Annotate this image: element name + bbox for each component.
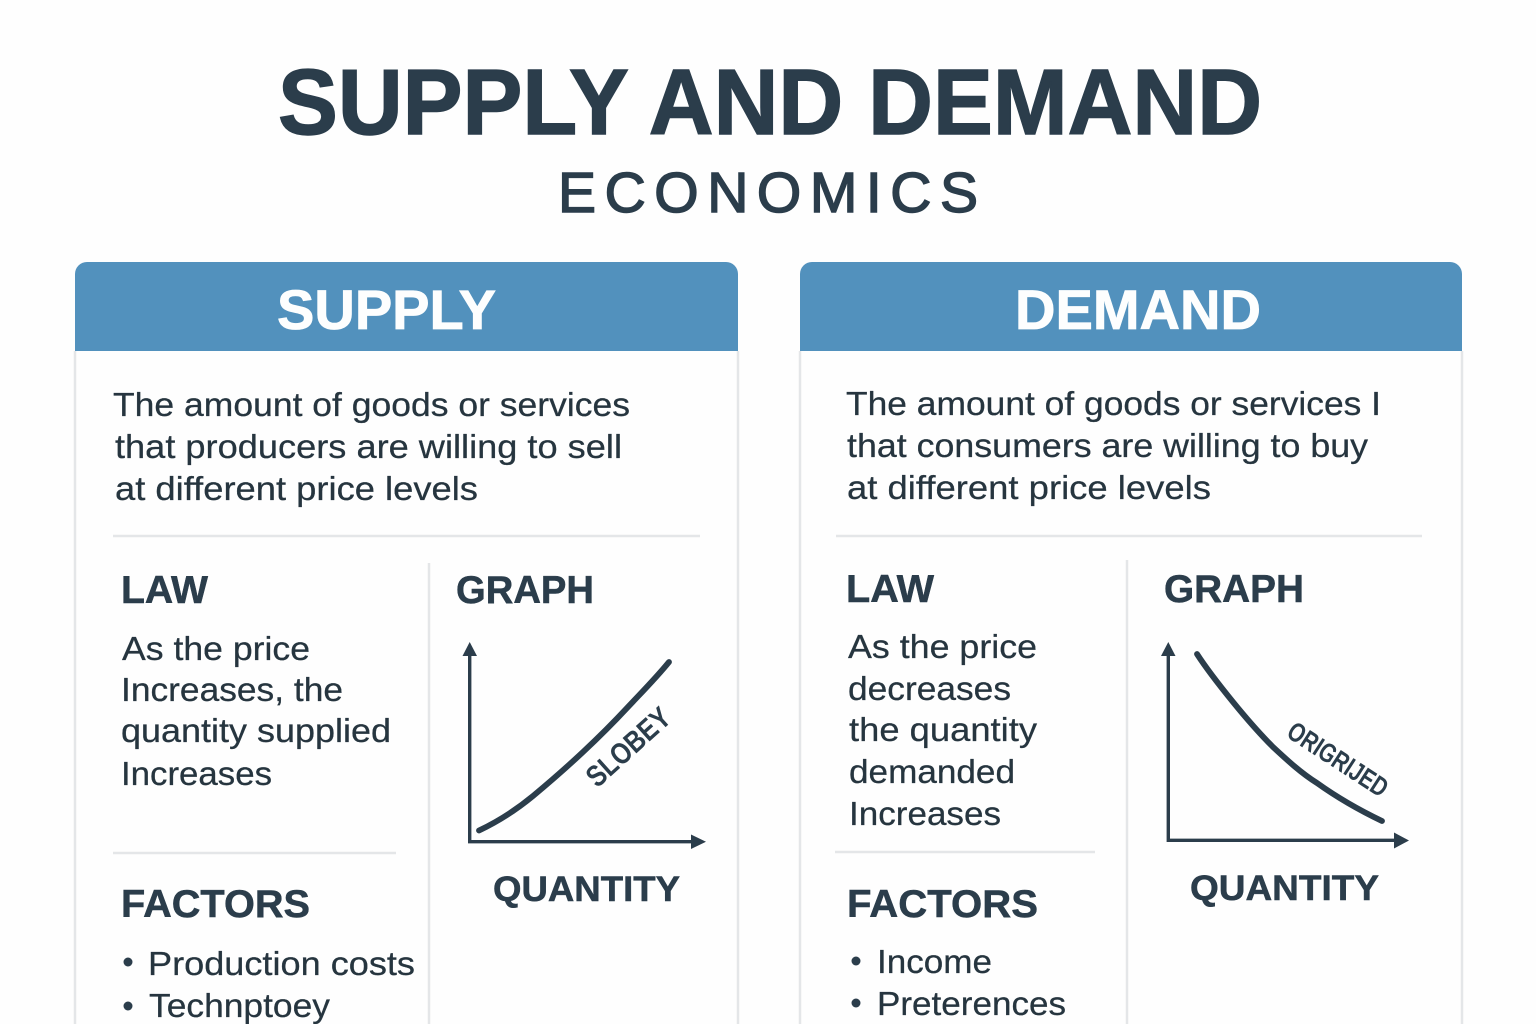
supply definition: The amount of goods or services bbox=[113, 386, 630, 423]
demand definition: that consumers are willing to buy bbox=[847, 427, 1369, 464]
panel: demand bbox=[800, 262, 1462, 1024]
demand graph: ORIGRIJED bbox=[1282, 716, 1394, 803]
panel: supply bbox=[75, 262, 738, 1024]
demand factors list: Income bbox=[877, 943, 992, 980]
demand graph axis label: QUANTITY bbox=[1190, 869, 1379, 908]
supply heading: SUPPLY bbox=[277, 278, 496, 341]
supply definition: that producers are willing to sell bbox=[115, 428, 622, 465]
supply law heading: LAW bbox=[121, 569, 208, 612]
demand law text: the quantity bbox=[849, 711, 1038, 748]
supply factors heading: FACTORS bbox=[121, 883, 310, 926]
demand law heading: LAW bbox=[846, 568, 934, 611]
title: SUPPLY AND DEMAND bbox=[278, 50, 1262, 154]
supply header bar bbox=[75, 262, 738, 351]
supply definition bbox=[113, 386, 630, 507]
supply law text: Increases bbox=[121, 755, 272, 792]
supply graph: SLOBEY bbox=[580, 701, 678, 794]
supply factors list bbox=[124, 945, 415, 1024]
demand factors list: Preterences bbox=[877, 985, 1066, 1022]
demand law text bbox=[848, 628, 1038, 832]
demand graph bbox=[1161, 642, 1409, 848]
demand heading: DEMAND bbox=[1015, 278, 1261, 341]
demand law text: Increases bbox=[849, 795, 1001, 832]
supply graph axis label: QUANTITY bbox=[493, 870, 680, 909]
demand graph heading: GRAPH bbox=[1164, 568, 1304, 611]
supply graph heading: GRAPH bbox=[456, 569, 594, 612]
supply law text: As the price bbox=[122, 630, 310, 667]
supply factors list: Technptoey bbox=[149, 987, 331, 1024]
demand header bar bbox=[800, 262, 1462, 351]
supply factors list: Production costs bbox=[148, 945, 415, 982]
demand factors list bbox=[852, 943, 1066, 1022]
demand definition: at different price levels bbox=[847, 469, 1211, 506]
supply law text: Increases, the bbox=[121, 671, 343, 708]
subtitle: ECONOMICS bbox=[558, 161, 978, 225]
demand definition bbox=[846, 385, 1381, 506]
demand law text: As the price bbox=[848, 628, 1037, 665]
supply law text bbox=[121, 630, 391, 792]
demand law text: decreases bbox=[848, 670, 1011, 707]
supply law text: quantity supplied bbox=[121, 712, 391, 749]
supply graph bbox=[462, 642, 706, 849]
demand definition: The amount of goods or services I bbox=[846, 385, 1381, 422]
supply definition: at different price levels bbox=[115, 470, 478, 507]
demand factors heading: FACTORS bbox=[847, 883, 1038, 926]
demand law text: demanded bbox=[849, 753, 1015, 790]
